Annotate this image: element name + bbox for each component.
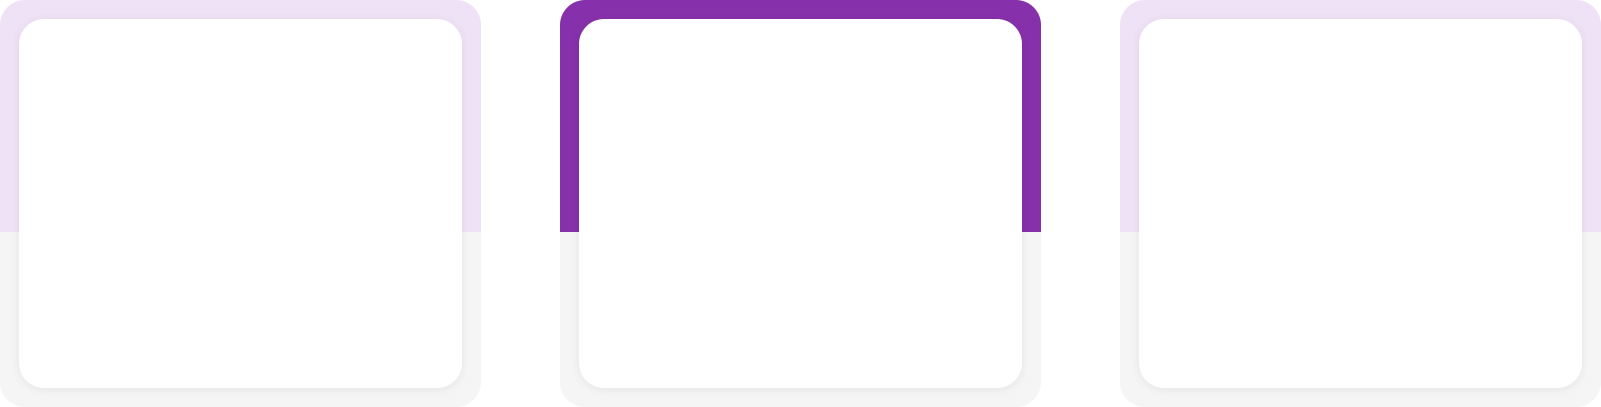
panel: right card bbox=[1120, 0, 1601, 407]
left card white content area bbox=[19, 19, 462, 388]
left card light purple top band bbox=[0, 0, 481, 232]
center card dark purple top band bbox=[560, 0, 1041, 232]
panel: center card bbox=[560, 0, 1041, 407]
center card white content area bbox=[579, 19, 1022, 388]
right card white content area bbox=[1139, 19, 1582, 388]
right card light purple top band bbox=[1120, 0, 1601, 232]
panel: left card bbox=[0, 0, 481, 407]
